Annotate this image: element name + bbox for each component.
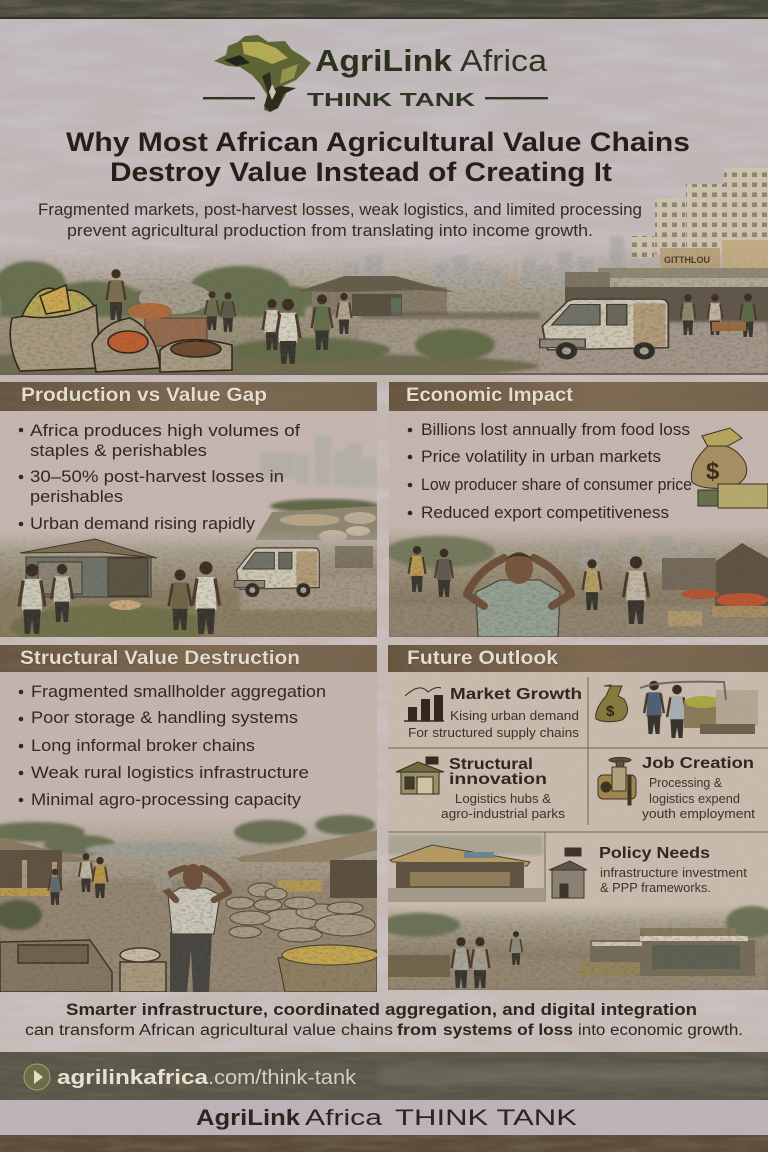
bullet list [19, 421, 300, 533]
card: Market Growth [404, 686, 582, 740]
apartment buildings [632, 168, 768, 258]
bystanders [408, 546, 649, 624]
skyline [260, 436, 377, 487]
bullet list [408, 420, 692, 522]
top dark textured band [0, 0, 768, 19]
hero illustration: market scene [0, 168, 768, 380]
logo [203, 35, 548, 112]
closing statement: from [397, 1022, 437, 1039]
dividers [388, 677, 768, 902]
website url [57, 1067, 357, 1089]
shop signs and canopy: GITTHLOU [664, 255, 710, 265]
bullet list: Africa produces high volumes of [30, 421, 300, 440]
card: Market Growth: For structured supply chains [408, 726, 579, 740]
bullet list: Low producer share of consumer price [421, 475, 692, 494]
bullet list: Urban demand rising rapidly [30, 514, 256, 533]
bullet list: perishables [30, 487, 123, 506]
panel: Economic Impact: Economic Impact [406, 385, 574, 406]
shop signs and canopy [565, 240, 768, 332]
card: Policy Needs [549, 845, 748, 898]
brick wall [145, 318, 207, 346]
card: Job Creation: logistics expend [649, 792, 740, 806]
title [66, 127, 690, 187]
truck [335, 546, 373, 568]
card: Job Creation: youth employment [642, 807, 756, 821]
icon: government building [549, 848, 587, 898]
card: Market Growth: Market Growth [450, 686, 582, 703]
card: Policy Needs: infrastructure investment [600, 866, 748, 880]
illustration: future market street [380, 905, 768, 990]
icon: play badge [24, 1064, 50, 1090]
card: Policy Needs: Policy Needs [599, 845, 710, 862]
card: Structural innovation: agro-industrial parks [441, 807, 565, 821]
scene background [0, 815, 377, 992]
brand wordmark [315, 43, 548, 78]
brand wordmark: AgriLink [315, 43, 453, 78]
panel: Future Outlook: Future Outlook [407, 648, 558, 669]
think tank label: THINK TANK [307, 90, 475, 110]
illustration: money bag and vendors: $ [606, 703, 615, 720]
grain sacks with produce [10, 285, 232, 372]
website url: .com/think-tank [208, 1067, 357, 1089]
card: Structural innovation: Structural [449, 756, 533, 773]
scene background [389, 525, 768, 637]
website band [0, 1052, 768, 1100]
city skyline [345, 236, 624, 288]
title: Destroy Value Instead of Creating It [110, 157, 612, 187]
icon: money bag and cash: $ [706, 458, 720, 485]
card: Structural innovation: innovation [449, 771, 547, 788]
left shed [0, 838, 100, 890]
panel: Production vs Value Gap: Production vs Value Gap [21, 385, 267, 406]
basket of fruit [278, 945, 378, 992]
closing statement [25, 1001, 743, 1039]
closing statement: can transform African agricultural value chains [25, 1022, 393, 1039]
card: Job Creation: Processing & [649, 776, 723, 790]
worried man [467, 552, 571, 637]
rocks and shrubs [255, 499, 380, 542]
footer brand line: THINK TANK [395, 1105, 577, 1130]
closing statement: into economic growth. [578, 1022, 743, 1039]
bullet list: Billions lost annually from food loss [421, 420, 690, 439]
bullet list: Long informal broker chains [31, 736, 255, 755]
bullet list: Weak rural logistics infrastructure [31, 763, 309, 782]
closing statement: Smarter infrastructure, coordinated aggregation, and digital integration [66, 1001, 697, 1019]
market stalls [662, 543, 768, 626]
farmers [19, 561, 220, 634]
bullet list [19, 682, 326, 809]
vendor [107, 269, 125, 320]
right shed [235, 830, 377, 898]
bullet list: Poor storage & handling systems [31, 708, 298, 727]
closing statement: systems of loss [443, 1022, 573, 1039]
subtitle [38, 200, 642, 240]
card: Structural innovation [396, 756, 565, 821]
header bar [388, 645, 768, 672]
card: Structural innovation: Logistics hubs & [455, 792, 552, 806]
bullet list: staples & perishables [30, 441, 207, 460]
bottom wood band [0, 1135, 768, 1152]
sellers [0, 853, 108, 930]
ground [0, 530, 377, 637]
bullet list: Reduced export competitiveness [421, 503, 669, 522]
icon: bar chart [404, 688, 444, 721]
footer brand line: AgriLink [196, 1105, 301, 1130]
illustration: money bag and vendors [596, 681, 758, 738]
card: Policy Needs: & PPP frameworks. [600, 881, 711, 895]
footer brand line [0, 1100, 768, 1135]
bullet list: Price volatility in urban markets [421, 447, 661, 466]
website url: agrilinkafrica [57, 1067, 209, 1089]
card: Job Creation: Job Creation [642, 755, 754, 772]
subtitle: Fragmented markets, post-harvest losses, weak logistics, and limited processing [38, 200, 642, 219]
icon: Africa tree [214, 35, 311, 112]
icon: machine operator [598, 758, 636, 805]
people [205, 291, 352, 364]
illustration: market hall [388, 835, 545, 902]
icon: money bag and cash [691, 428, 768, 508]
panel: Production vs Value Gap [0, 382, 380, 649]
ground [0, 322, 768, 380]
footer brand line: Africa [305, 1105, 383, 1130]
panel: Economic Impact [385, 382, 768, 637]
panel: Future Outlook [380, 645, 768, 990]
panel: Structural Value Destruction [0, 645, 378, 992]
street vendors [680, 293, 756, 337]
worried man [152, 864, 229, 992]
delivery van [540, 299, 668, 360]
bullet list: 30–50% post-harvest losses in [30, 467, 284, 486]
empty crate [0, 940, 166, 992]
bullet list: Minimal agro-processing capacity [31, 790, 302, 809]
brand wordmark: Africa [460, 43, 548, 78]
bullet list: Fragmented smallholder aggregation [31, 682, 326, 701]
header bar [0, 645, 377, 672]
card: Job Creation [598, 755, 756, 821]
van [235, 548, 319, 597]
trees [0, 261, 318, 317]
header bar [389, 382, 768, 411]
panel: Structural Value Destruction: Structural Value Destruction [20, 648, 300, 669]
hut [20, 539, 157, 597]
title: Why Most African Agricultural Value Chains [66, 127, 690, 157]
card: Market Growth: Kising urban demand [450, 709, 579, 723]
central market hut [298, 276, 455, 316]
subtitle: prevent agricultural production from translating into income growth. [67, 221, 593, 240]
header bar [0, 382, 377, 411]
icon: warehouse [396, 757, 444, 794]
stone pile [226, 883, 375, 942]
crowd band [360, 312, 540, 319]
